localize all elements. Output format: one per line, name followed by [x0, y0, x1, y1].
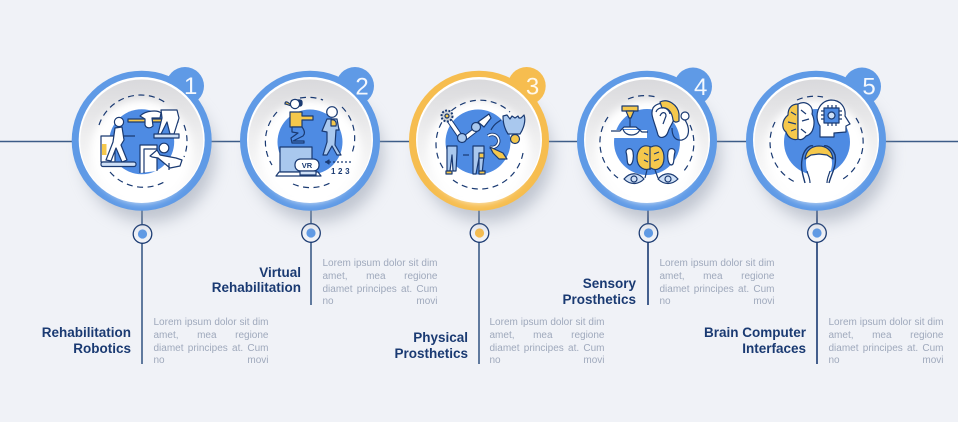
text block 2: no movi: [322, 296, 438, 307]
heading: Sensory Prosthetics: Sensory: [583, 276, 636, 291]
text block 3: diamet principes at. Cum: [490, 343, 604, 354]
icon: virtual rehabilitation: [265, 97, 355, 188]
text block 4: amet, mea regione: [660, 271, 774, 282]
text block 1: no movi: [154, 355, 268, 366]
step 2 medallion: [240, 67, 383, 222]
heading: Brain Computer Interfaces: [704, 325, 806, 356]
step 3 medallion: [409, 67, 552, 222]
text block 3: no movi: [490, 355, 604, 366]
scale digits: 123: [331, 167, 352, 176]
text block 2: [322, 258, 438, 307]
step 2 connector: [302, 205, 320, 305]
text block 5: no movi: [828, 355, 944, 366]
heading: Brain Computer Interfaces: Interfaces: [742, 340, 806, 356]
badge number 2: 2: [355, 74, 369, 100]
text block 1: diamet principes at. Cum: [154, 343, 268, 354]
text block 3: Lorem ipsum dolor sit dim: [490, 317, 604, 328]
heading: Physical Prosthetics: Physical: [413, 330, 468, 345]
heading: Virtual Rehabilitation: [212, 264, 301, 295]
heading: Rehabilitation Robotics: Rehabilitation: [42, 325, 131, 340]
icon: sensory prosthetics: [600, 96, 694, 184]
heading: Sensory Prosthetics: [562, 276, 636, 306]
heading: Physical Prosthetics: [394, 330, 468, 360]
text block 4: no movi: [660, 296, 774, 307]
text block 2: amet, mea regione: [322, 271, 438, 282]
heading: Rehabilitation Robotics: Robotics: [73, 340, 131, 356]
heading: Sensory Prosthetics: Prosthetics: [562, 292, 636, 306]
text block 5: diamet principes at. Cum: [828, 343, 944, 354]
icon: physical prosthetics: [436, 100, 525, 189]
step 4 connector: [639, 205, 658, 305]
text block 5: Lorem ipsum dolor sit dim: [828, 317, 944, 328]
text block 4: [660, 258, 774, 307]
icon: rehabilitation robotics: [99, 95, 187, 187]
heading: Rehabilitation Robotics: [42, 325, 131, 356]
badge number 1: 1: [184, 73, 197, 100]
heading: Brain Computer Interfaces: Brain Computer: [704, 325, 806, 340]
step 3 connector: [470, 205, 489, 364]
text block 3: [490, 317, 604, 366]
badge number 3: 3: [526, 74, 539, 100]
badge number 4: 4: [694, 74, 707, 101]
text block 5: amet, mea regione: [828, 330, 944, 341]
text block 4: diamet principes at. Cum: [660, 284, 774, 295]
badge number 5: 5: [862, 74, 876, 100]
text block 1: [154, 317, 268, 366]
text block 1: amet, mea regione: [154, 330, 268, 341]
text block 2: Lorem ipsum dolor sit dim: [322, 258, 438, 269]
step 5 connector: [808, 205, 826, 364]
icon: brain computer interfaces: [770, 96, 863, 183]
VR label: VR: [302, 161, 313, 170]
step 5 medallion: [746, 68, 889, 222]
heading: Virtual Rehabilitation: Virtual: [259, 264, 301, 280]
timeline horizontal line: [0, 140, 958, 142]
step 1 connector: [133, 205, 152, 364]
text block 4: Lorem ipsum dolor sit dim: [660, 258, 774, 269]
step 1 medallion: [72, 67, 215, 222]
text block 2: diamet principes at. Cum: [322, 284, 438, 295]
heading: Virtual Rehabilitation: Rehabilitation: [212, 280, 301, 295]
text block 3: amet, mea regione: [490, 330, 604, 341]
heading: Physical Prosthetics: Prosthetics: [394, 346, 468, 360]
text block 5: [828, 317, 944, 366]
text block 1: Lorem ipsum dolor sit dim: [154, 317, 268, 328]
step 4 medallion: [577, 68, 720, 222]
